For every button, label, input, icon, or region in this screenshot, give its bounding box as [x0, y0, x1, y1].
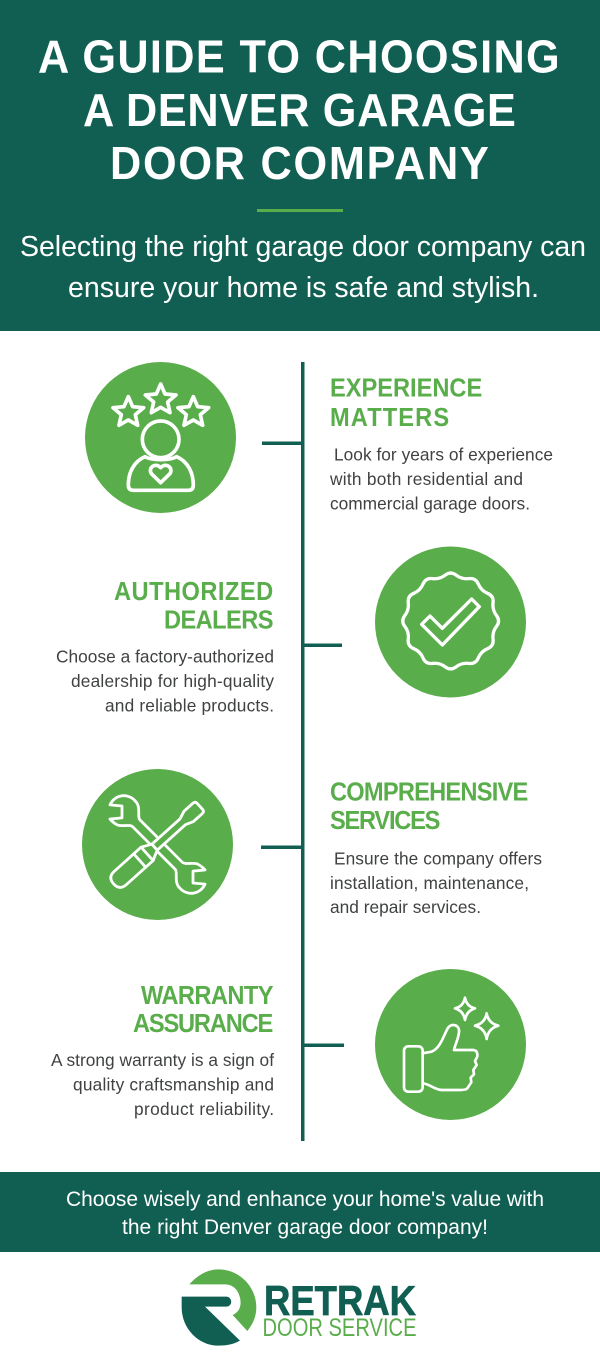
section: warranty assurance: ASSURANCE — [133, 1010, 273, 1038]
section: authorized dealers: AUTHORIZED — [114, 578, 273, 606]
footer banner — [0, 1172, 600, 1252]
section: experience matters: Look for years of experience — [334, 445, 553, 465]
section: comprehensive services: Ensure the company offers — [334, 848, 542, 868]
subtitle — [20, 231, 586, 304]
section: authorized dealers: Choose a factory-authorized — [56, 647, 274, 667]
section: authorized dealers — [56, 578, 274, 715]
footer banner: Choose wisely and enhance your home's value with — [66, 1188, 544, 1211]
timeline — [261, 362, 344, 1141]
section: warranty assurance: WARRANTY — [141, 982, 274, 1010]
icon: badge with check mark — [375, 546, 526, 698]
section: comprehensive services: and repair services. — [330, 897, 481, 917]
logo: Retrak Door Service: RETRAK — [264, 1277, 416, 1324]
section: warranty assurance: A strong warranty is a sign of — [51, 1050, 274, 1070]
section: comprehensive services: SERVICES — [330, 807, 440, 835]
section: experience matters: with both residential and — [329, 469, 523, 489]
section: warranty assurance: quality craftsmanship and — [73, 1074, 274, 1094]
footer banner: the right Denver garage door company! — [122, 1216, 488, 1239]
section: authorized dealers: and reliable products. — [105, 695, 274, 715]
section: experience matters: MATTERS — [330, 404, 449, 432]
header panel — [0, 0, 600, 331]
title: A DENVER GARAGE — [83, 86, 516, 136]
section: comprehensive services: installation, maintenance, — [330, 873, 529, 893]
section: warranty assurance — [51, 982, 274, 1119]
subtitle: Selecting the right garage door company can — [20, 231, 586, 263]
section: authorized dealers: DEALERS — [164, 607, 273, 635]
icon: person with stars — [85, 362, 236, 513]
section: warranty assurance: product reliability. — [134, 1099, 274, 1119]
title: A GUIDE TO CHOOSING — [38, 33, 560, 83]
section: authorized dealers: dealership for high-quality — [71, 671, 274, 691]
icon: wrench and screwdriver — [82, 769, 233, 920]
section: experience matters: commercial garage doors. — [330, 493, 530, 513]
section: experience matters — [329, 375, 553, 513]
section: comprehensive services: COMPREHENSIVE — [330, 779, 528, 807]
section: comprehensive services — [330, 779, 542, 917]
subtitle: ensure your home is safe and stylish. — [68, 272, 539, 304]
title: DOOR COMPANY — [110, 139, 489, 189]
logo: Retrak Door Service: DOOR SERVICE — [262, 1314, 416, 1342]
logo: Retrak Door Service — [182, 1269, 416, 1346]
icon: thumbs up with sparkles — [375, 969, 526, 1120]
section: experience matters: EXPERIENCE — [330, 375, 482, 403]
title — [38, 33, 560, 189]
